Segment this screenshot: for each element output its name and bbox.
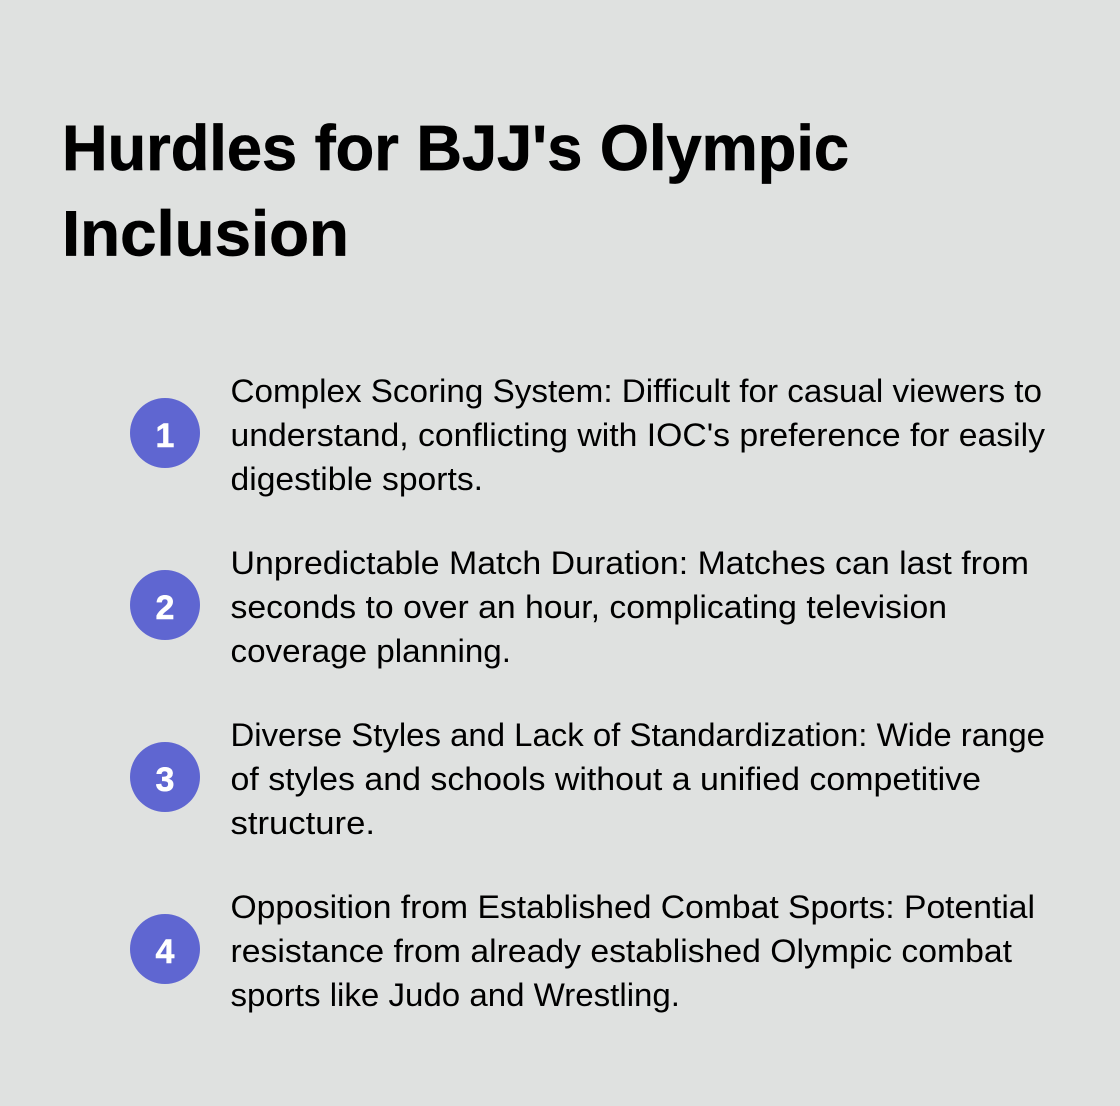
text: opposition from established combat sports: Opposition from Established Combat Sports: Potential: [230, 889, 1035, 925]
list item 4: [130, 889, 1035, 1013]
title: Hurdles for BJJ's Olympic: [62, 112, 849, 184]
list item 2: [130, 545, 1029, 669]
text: unpredictable match duration: Unpredictable Match Duration: Matches can last from: [230, 545, 1029, 581]
number badge 2: 2: [156, 589, 174, 627]
text: opposition from established combat sports: [230, 889, 1035, 1013]
number badge 4: 4: [156, 933, 175, 971]
list item 3: [130, 717, 1045, 841]
text: complex scoring system: Complex Scoring System: Difficult for casual viewers to: [230, 373, 1042, 409]
text: diverse styles: of styles and schools without a unified competitive: [230, 761, 981, 797]
text: unpredictable match duration: [230, 545, 1029, 669]
list item 1: [130, 373, 1046, 497]
text: diverse styles: [230, 717, 1045, 841]
number badge 3: [130, 742, 200, 812]
title: Inclusion: [62, 198, 349, 270]
number badge 1: [130, 398, 200, 468]
text: complex scoring system: digestible sports.: [230, 461, 483, 497]
text: complex scoring system: [230, 373, 1046, 497]
number badge 4: [130, 914, 200, 984]
text: diverse styles: Diverse Styles and Lack of Standardization: Wide range: [230, 717, 1045, 753]
number badge 3: 3: [156, 761, 174, 799]
title: [62, 112, 849, 270]
number badge 1: 1: [156, 417, 174, 455]
text: unpredictable match duration: seconds to over an hour, complicating television: [230, 589, 947, 625]
text: opposition from established combat sports: sports like Judo and Wrestling.: [230, 977, 680, 1013]
number badge 2: [130, 570, 200, 640]
text: unpredictable match duration: coverage planning.: [230, 633, 511, 669]
text: complex scoring system: understand, conflicting with IOC's preference for easily: [230, 417, 1046, 453]
text: diverse styles: structure.: [230, 805, 375, 841]
text: opposition from established combat sports: resistance from already established Olympic combat: [230, 933, 1012, 969]
